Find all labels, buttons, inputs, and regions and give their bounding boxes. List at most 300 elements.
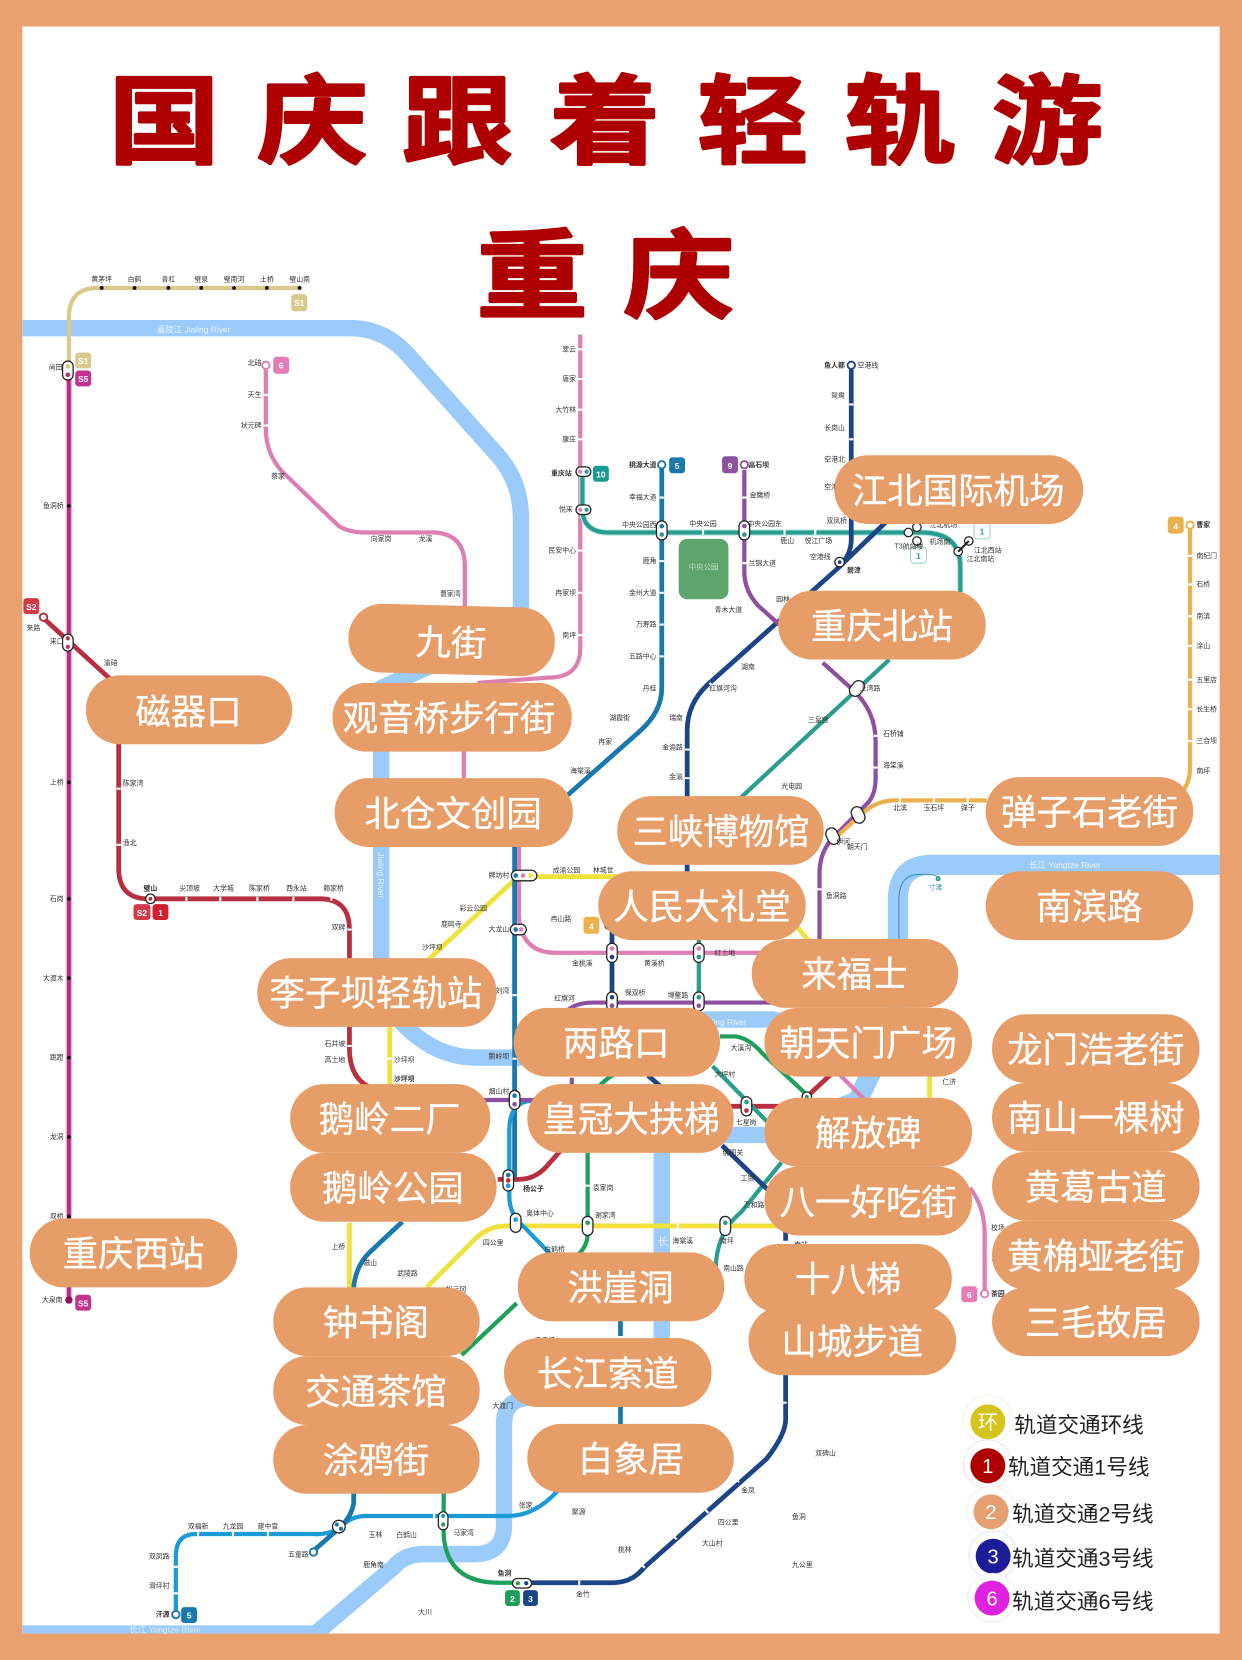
station names: 金凤 (741, 1486, 755, 1495)
station names: 红旗河 (554, 993, 575, 1002)
station names: 园林 (776, 594, 790, 603)
station names: 朝天门 (847, 842, 868, 851)
pill: 重庆西站: 重庆西站 (63, 1234, 204, 1274)
station names: 袁家岗 (593, 1183, 614, 1192)
station names: 南滨 (1196, 611, 1210, 620)
station names: 寸滩 (929, 882, 942, 891)
title line 2: 重 (476, 223, 588, 332)
station names: 空港东 (824, 482, 845, 491)
station names: 三合坝 (1196, 736, 1217, 745)
legend: line 3: 轨道交通3号线 (1012, 1546, 1154, 1571)
station names: 空港北 (824, 455, 845, 464)
pill: 两路口: 两路口 (563, 1023, 669, 1063)
station names: 五童路 (288, 1549, 309, 1558)
station names: 松云冈 (446, 1285, 467, 1294)
pill: 洪崖洞 (518, 1252, 724, 1321)
pill: 交通茶馆 (273, 1356, 480, 1425)
line 10 (582, 474, 960, 1270)
line tags: S2 (137, 908, 147, 918)
station names: 大山村 (702, 1539, 723, 1548)
station names: 尖顶坡 (179, 883, 200, 892)
legend: ring line: 环 (978, 1412, 998, 1434)
station names: 碧津 (847, 566, 861, 575)
station names: 光电园 (781, 782, 802, 791)
station names: 北滨 (893, 803, 907, 812)
station names: 南坪 (562, 630, 576, 639)
station names: 南纪门 (1196, 551, 1217, 560)
ring line (349, 877, 930, 1292)
line tags: 1 (158, 908, 163, 918)
station names: 重庆站 (551, 468, 572, 477)
pill: 涂鸦街: 涂鸦街 (323, 1441, 429, 1481)
station names: 鱼洞 (498, 1568, 512, 1577)
station names: 翠云 (562, 345, 576, 353)
station names: 大学城 (213, 883, 234, 892)
pill: 北仓文创园 (335, 778, 573, 847)
line 4 (832, 529, 1190, 841)
station names: 兰锦大道 (749, 558, 776, 567)
station names: 白鹤 (128, 275, 142, 284)
pill: 南山一棵树 (992, 1083, 1200, 1152)
station names: 长生桥 (1196, 704, 1217, 713)
station names: 大渡木 (43, 973, 64, 982)
station names: 湖霞街 (609, 713, 630, 722)
central park (679, 539, 728, 599)
station names: 金州大道 (629, 588, 657, 597)
station names: 南站 (794, 1240, 808, 1249)
legend: line 3: 3 (988, 1547, 999, 1569)
line tags: 1 (916, 551, 921, 561)
station names: 南山路 (723, 1263, 744, 1272)
station names: 中央公园 (689, 519, 717, 528)
pill: 南滨路: 南滨路 (1036, 887, 1143, 927)
river label: Yangtze vertical: 长 (658, 1236, 669, 1248)
pill: 鹅岭二厂 (290, 1084, 490, 1153)
station names: 李子坝 (646, 1068, 667, 1077)
legend: line 1: 1 (982, 1456, 993, 1478)
pill: 弹子石老街 (986, 777, 1193, 846)
station names: 四公里 (718, 1518, 739, 1526)
pill: 鹅岭公园: 鹅岭公园 (322, 1169, 464, 1209)
legend: line 2: 2 (985, 1502, 997, 1524)
legend: line 6: 轨道交通6号线 (1012, 1589, 1154, 1614)
station names: 来路 (27, 623, 40, 632)
station names: 鱼洞桥 (43, 501, 64, 510)
station names: 鹿角 (643, 556, 657, 565)
line 3 (522, 369, 889, 1583)
station names: 空港线 (858, 360, 878, 369)
station names: 五里店 (1196, 675, 1217, 684)
station names: 万和路 (744, 1200, 765, 1209)
line tags: 2 (510, 1594, 515, 1604)
station names: 聚源 (572, 1507, 586, 1516)
station names: 长岗山 (824, 423, 845, 432)
river: Yangtze south (11, 1122, 805, 1634)
station names: 桃林 (618, 1545, 632, 1554)
station names (27, 275, 1217, 1619)
legend: ring line: 轨道交通环线 (1014, 1412, 1144, 1437)
central park: 中央公园 (689, 562, 718, 572)
legend: line 2 (967, 1486, 1154, 1535)
station names: 红土地 (715, 948, 735, 957)
pill: 山城步道 (749, 1306, 956, 1375)
pill: 观音桥步行街 (333, 683, 572, 752)
river: Yangtze east (838, 854, 1220, 1098)
station names: 鸳鸯 (831, 391, 845, 400)
station names: 江北西站 (974, 546, 1002, 555)
station names: 上桥 (50, 777, 64, 786)
pill: 三峡博物馆: 三峡博物馆 (632, 812, 810, 852)
pill: 弹子石老街: 弹子石老街 (1001, 793, 1178, 833)
station names: 沙坪坝 (422, 943, 443, 952)
station names: 曹家湾 (440, 589, 461, 598)
line S1 (69, 286, 302, 366)
station names: 石岗 (50, 895, 64, 903)
station names: 跳蹬 (50, 1053, 64, 1062)
river label: Yangtze south: 长江 Yangtze River (129, 1624, 201, 1634)
station names: 机场南 (930, 537, 950, 546)
river branch line: Cuntan (899, 874, 938, 942)
station names: 张家 (519, 1501, 533, 1510)
station names: 瑞南 (669, 713, 683, 722)
station names: 高土地 (325, 1055, 345, 1064)
station names: 弹子 (961, 803, 975, 812)
station names: 状元碑 (241, 421, 262, 430)
station names: 涂山 (1196, 641, 1210, 650)
pill: 九街: 九街 (415, 622, 487, 664)
station names: 蔡家 (271, 472, 285, 481)
pill: 长江索道: 长江索道 (537, 1354, 679, 1394)
pill: 重庆西站 (30, 1219, 237, 1287)
river: Jialing (22, 320, 781, 1066)
pill: 八一好吃街 (764, 1167, 972, 1235)
station names: 海棠溪 (570, 766, 591, 775)
pill: 人民大礼堂 (598, 871, 806, 940)
pill: 十八梯: 十八梯 (795, 1260, 901, 1300)
station names: 双碑山 (815, 1449, 836, 1458)
title line 1: 着 (549, 68, 660, 177)
station names: 中央公园西 (622, 520, 657, 529)
pill: 十八梯 (744, 1244, 952, 1313)
station names: 白鹤桥 (544, 1244, 565, 1253)
pill: 人民大礼堂: 人民大礼堂 (613, 887, 791, 927)
pill: 解放碑: 解放碑 (815, 1113, 921, 1153)
station names: 武陵路 (397, 1269, 418, 1278)
legend (963, 1395, 1154, 1622)
station names: 金竹 (576, 1589, 590, 1598)
pill: 龙门浩老街: 龙门浩老街 (1007, 1030, 1184, 1070)
pill: 三毛故居 (992, 1287, 1200, 1356)
rivers (11, 328, 1228, 1634)
station names: 四公里 (483, 1239, 504, 1247)
station names: 来口 (50, 638, 64, 646)
pill: 磁器口: 磁器口 (135, 692, 242, 732)
pill: 两路口 (514, 1008, 720, 1077)
station names: 红旗河沟 (709, 683, 737, 692)
river label: Jialing: 嘉陵江 Jialing River (157, 324, 231, 334)
station names: 鹿角南 (363, 1560, 384, 1569)
station names: 金鹰桥 (750, 491, 770, 500)
station names: 丹桂 (643, 683, 657, 692)
pill: 来福士: 来福士 (801, 955, 908, 995)
station names: 茶园 (991, 1289, 1005, 1298)
station names: 万寿路 (636, 620, 657, 629)
line 5 (176, 469, 662, 1610)
pill: 皇冠大扶梯 (527, 1084, 734, 1153)
pill: 重庆北站: 重庆北站 (811, 606, 953, 646)
station names: 奥体中心 (526, 1208, 554, 1217)
pill: 黄桷垭老街 (992, 1221, 1200, 1289)
station names: 磁山 (363, 1258, 377, 1267)
station names: 建中官 (258, 1522, 278, 1531)
station names: 沙坪坝 (394, 1074, 415, 1083)
station names: 滑坪村 (149, 1581, 170, 1590)
station names: 冉家坝 (555, 588, 576, 597)
title line 2: 庆 (623, 223, 734, 332)
legend: line 3 (969, 1531, 1154, 1580)
station names: 白鹤山 (396, 1530, 417, 1539)
station interchanges (63, 361, 973, 1588)
pill: 观音桥步行街: 观音桥步行街 (343, 698, 555, 738)
station names: 康庄 (562, 434, 576, 443)
river label: Jialing centre: ling River (712, 1017, 747, 1027)
line tags: 3 (528, 1594, 533, 1604)
station names: 悦江广场 (805, 536, 832, 545)
station names: 大溪沟 (731, 1043, 751, 1052)
station names: 冉家 (598, 737, 612, 746)
station names: 校场 (991, 1223, 1005, 1232)
station names: 双碑 (331, 923, 345, 932)
pill: 重庆北站 (778, 591, 986, 660)
station names: 黄茅坪 (91, 275, 112, 284)
station names: 鹿山 (780, 536, 794, 545)
title line 1: 跟 (402, 68, 514, 177)
line tags: 4 (1173, 521, 1178, 531)
station names: 大渡门 (492, 1401, 513, 1410)
station names: 博鳌路 (668, 990, 688, 999)
station names: 上桥 (331, 1242, 345, 1251)
station names: 曹家 (1196, 520, 1210, 529)
station names: 杨公子 (523, 1184, 544, 1193)
pill: 江北国际机场 (834, 455, 1083, 524)
station names: 大竹林 (555, 405, 576, 414)
station names: 江北南站 (967, 554, 994, 563)
station names: 谢家湾 (595, 1210, 616, 1219)
pill: 来福士 (752, 939, 958, 1008)
pill: 北仓文创园: 北仓文创园 (365, 794, 542, 834)
station names: 佛图关 (723, 1148, 743, 1157)
pill: 白象居: 白象居 (578, 1440, 684, 1480)
terminal circles (40, 362, 1194, 1618)
station names: 湖南 (741, 662, 755, 671)
station names: 赖家桥 (323, 883, 344, 892)
station names: 黄溪桥 (644, 959, 665, 968)
line tags: 5 (187, 1611, 192, 1621)
station names: 金渝路 (662, 743, 683, 752)
pill: 钟书阁: 钟书阁 (323, 1303, 429, 1343)
station names: 桃源大道 (629, 460, 657, 469)
station names: 璧南河 (224, 275, 244, 284)
river label: Jialing vertical: Jialing River (376, 852, 386, 898)
title line 1 (109, 68, 1103, 177)
station names: 林城世 (593, 865, 614, 874)
station names: 中央公园东 (748, 519, 782, 528)
station names: 天生 (248, 390, 262, 399)
station names: 幸福大道 (629, 493, 657, 502)
pill: 长江索道 (504, 1338, 712, 1407)
line tags: S2 (26, 602, 37, 612)
station names: 鱼洞路 (826, 891, 847, 900)
river label: Yangtze: 长江 Yangtze River (1029, 860, 1101, 870)
station names: 向家岗 (371, 534, 392, 543)
line tags: 6 (279, 360, 284, 370)
title line 1: 游 (992, 68, 1103, 177)
line tags: 1 (980, 527, 985, 537)
station names: 鹿鸣寺 (441, 919, 462, 928)
pill: 三毛故居: 三毛故居 (1025, 1303, 1167, 1343)
pill: 黄葛古道: 黄葛古道 (1025, 1167, 1167, 1207)
station names: 长福路 (789, 637, 810, 646)
station names: 宁台 (506, 1369, 520, 1378)
line tags: 6 (967, 1290, 972, 1300)
station names: 彩云公园 (460, 903, 487, 912)
station names: 双凤路 (149, 1551, 170, 1560)
station names: 马王场 (535, 1335, 555, 1344)
station names: 双福新 (188, 1522, 208, 1531)
station names: 七星岗 (736, 1117, 757, 1126)
station names: 宁家坝 (628, 1465, 649, 1474)
station names: 石桥铺 (883, 729, 904, 738)
pill: 朝天门广场 (764, 1008, 972, 1077)
station names: 云林 (991, 1253, 1005, 1262)
line 9 (466, 470, 876, 1100)
station names: 工贸 (741, 1173, 755, 1182)
pill: 李子坝轻轨站: 李子坝轻轨站 (270, 974, 482, 1014)
line tags: 9 (728, 461, 733, 471)
pill: 龙门浩老街 (992, 1014, 1200, 1083)
station names: 高石坝 (749, 460, 769, 469)
line tags: S1 (294, 298, 305, 308)
station names: 渔北 (123, 838, 137, 847)
station names: 金渝 (669, 772, 683, 781)
title line 2 (476, 223, 734, 332)
station names: 陈家湾 (123, 779, 144, 788)
station names: 龙洞 (50, 1132, 64, 1141)
station names: 璧泉 (194, 275, 208, 284)
line 1 and S2 (43, 618, 852, 1179)
line tags: 4 (589, 922, 594, 932)
station names: 南坪 (720, 1236, 734, 1245)
pill: 九街 (348, 603, 556, 677)
station names: 青杠 (162, 275, 175, 284)
pill: 南山一棵树: 南山一棵树 (1007, 1099, 1184, 1139)
station names: 陈家桥 (249, 883, 270, 892)
station names: 汗源 (156, 1610, 170, 1619)
station names: 上湾路 (860, 683, 880, 692)
station names: 石井坡 (325, 1039, 345, 1048)
title line 1: 国 (109, 68, 220, 177)
line 6 (266, 335, 985, 1289)
station names: 冉山路 (551, 914, 571, 923)
station names: 沙坪坝 (394, 1055, 415, 1064)
legend: line 1 (963, 1440, 1149, 1488)
station names: 民安中心 (548, 546, 576, 555)
station names: 鱼洞 (792, 1512, 806, 1521)
station names: 鹅岭坝 (489, 1052, 509, 1061)
pill: 朝天门广场: 朝天门广场 (780, 1023, 957, 1063)
station names: 九龙园 (223, 1522, 243, 1531)
station names: 空港线 (810, 552, 831, 561)
station names: 重庆南站 (601, 1359, 629, 1368)
station names: 唐家 (562, 374, 576, 383)
station names: 保双桥 (625, 988, 645, 997)
station names: 大龙山 (489, 925, 509, 934)
station names: 五路中心 (629, 651, 657, 660)
line tags: S5 (78, 1298, 89, 1308)
pill: 解放碑 (764, 1098, 972, 1167)
station names: 西永站 (286, 883, 307, 892)
line S5 (65, 371, 73, 1304)
station names: 江北机场 (930, 520, 957, 529)
station names: 北碚 (248, 358, 262, 367)
station names: 青木大道 (715, 605, 742, 614)
pill: 南滨路 (986, 871, 1193, 940)
station names: 成渝公园 (553, 865, 580, 874)
pill: 鹅岭公园 (290, 1153, 497, 1222)
line tags: 5 (675, 461, 680, 471)
pill: 八一好吃街: 八一好吃街 (780, 1182, 957, 1222)
station names: 玉林 (369, 1530, 382, 1539)
pill: 山城步道: 山城步道 (781, 1322, 923, 1362)
station names: 悦来 (559, 504, 573, 513)
station names: 伊河 (836, 837, 850, 846)
station names: 双凤桥 (826, 516, 847, 525)
station names: 大坪村 (715, 1070, 735, 1079)
station names: 刘湾 (496, 986, 509, 995)
station names: 大川 (418, 1607, 432, 1616)
pill: 磁器口 (86, 675, 292, 744)
station names: T3航站楼 (895, 541, 923, 550)
station names: 鱼人都 (824, 360, 845, 369)
legend: line 6: 6 (986, 1588, 998, 1610)
pill: 钟书阁 (273, 1287, 480, 1356)
line tags: 10 (596, 469, 606, 479)
pill: 李子坝轻轨站 (257, 958, 497, 1027)
station names: 土桥 (260, 275, 274, 284)
pill: 交通茶馆: 交通茶馆 (305, 1372, 447, 1412)
pill: 黄葛古道 (992, 1152, 1200, 1221)
station names: 牌坊村 (489, 871, 509, 880)
station names: 尚田 (49, 362, 63, 371)
pill: 三峡博物馆 (617, 796, 824, 865)
station names: 马家湾 (453, 1528, 474, 1537)
pill: 涂鸦街 (273, 1425, 480, 1494)
line tags (23, 294, 1184, 1623)
station names: 南坪 (1196, 766, 1210, 775)
legend: line 1: 轨道交通1号线 (1008, 1455, 1149, 1480)
line tags: S1 (78, 356, 89, 366)
station names: 仁济 (942, 1077, 956, 1086)
legend: line 2: 轨道交通2号线 (1012, 1501, 1154, 1526)
station names: 三皇宫 (808, 715, 829, 724)
legend: line 6 (968, 1573, 1154, 1622)
line tags: S5 (78, 374, 89, 384)
pill: 白象居 (527, 1424, 734, 1493)
pill: 鹅岭二厂: 鹅岭二厂 (319, 1100, 461, 1140)
pill: 黄桷垭老街: 黄桷垭老街 (1007, 1236, 1184, 1276)
station names: 龙溪 (419, 534, 433, 543)
station ticks (117, 349, 1192, 1593)
